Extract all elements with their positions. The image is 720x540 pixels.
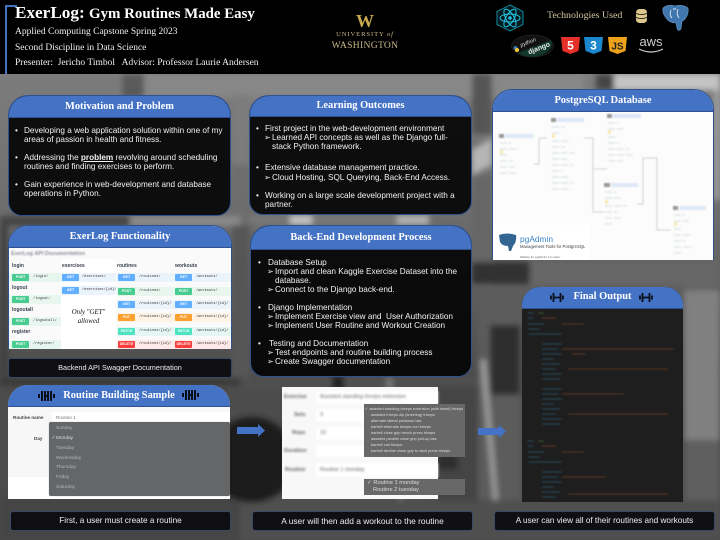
caption: view routines	[494, 511, 715, 531]
subtitle lines: Presenter: Jericho Timbol Advisor: Professor Laurie Andersen	[15, 58, 259, 68]
column: routines: PUT	[123, 315, 130, 319]
caption: create a routine: First, a user must create a routine	[59, 516, 182, 525]
icon: dumbbell left	[550, 293, 564, 302]
text block	[258, 258, 457, 366]
subtitle lines: Applied Computing Capstone Spring 2023	[15, 27, 178, 37]
column: login: /login/	[33, 275, 48, 279]
text block: Developing a web application solution within one of my	[24, 126, 222, 135]
day dropdown: Thursday	[56, 465, 76, 470]
icon: Python Django badge: python	[519, 37, 537, 49]
icon: dumbbell right	[639, 293, 653, 302]
column: routines: /routines/{id}/	[139, 302, 171, 306]
text block: ➢	[267, 285, 274, 294]
column: routines: /routines/{id}/	[139, 329, 171, 333]
logo: University of Washington: W	[356, 11, 374, 31]
blurred form: Routine 1 monday	[320, 467, 365, 473]
pgAdmin status: Waiting for pgAdmin 4 to start...	[520, 255, 562, 259]
day dropdown: Saturday	[56, 485, 75, 490]
text block: ➢	[267, 357, 274, 366]
heading: Routine Building Sample	[63, 390, 175, 401]
icon: JavaScript	[608, 37, 627, 54]
column: workouts: DELETE	[177, 342, 190, 346]
text block: Connect to the Django back-end.	[275, 285, 395, 294]
white lower area	[8, 477, 230, 499]
day dropdown	[49, 422, 230, 496]
exercise dropdown: barbell close grip bench press triceps	[371, 430, 435, 435]
text block: Database Setup	[268, 258, 327, 267]
text block: Learned API concepts as well as the Django full-	[272, 133, 448, 142]
day dropdown: ✓	[52, 436, 56, 441]
text block: ➢	[264, 133, 271, 142]
heading: PostgreSQL Database	[554, 95, 652, 106]
icon: CSS3: 3	[590, 38, 597, 52]
text block: •	[15, 126, 18, 135]
arrow: routine to workout	[237, 424, 265, 437]
column: routines	[117, 263, 175, 349]
blurred form: 10	[320, 430, 326, 436]
exercise dropdown: barbell alternate biceps curl biceps	[371, 424, 431, 429]
text block: Create Swagger documentation	[275, 357, 390, 366]
column: login: POST	[16, 297, 25, 301]
heading	[9, 96, 230, 118]
column: workouts: /workouts/{id}/	[196, 315, 228, 319]
heading: Learning Outcomes	[316, 100, 405, 111]
schema diagram	[498, 113, 706, 254]
column: login: /logout/	[33, 297, 50, 301]
swagger title: ExerLog API Documentation	[11, 251, 85, 257]
column: login: POST	[16, 275, 25, 279]
exercise dropdown: ✓ assisted standing triceps extension (with towel) triceps	[365, 406, 463, 411]
panel: ExerLog functionality	[8, 225, 232, 349]
subtitle lines	[15, 27, 259, 68]
heading	[9, 226, 231, 248]
text block: Gain experience in web-development and database	[24, 180, 211, 189]
form labels: Routine name	[13, 415, 43, 420]
icon: React	[496, 4, 524, 32]
text block: Implement User Routine and Workout Creation	[275, 321, 445, 330]
column: login	[9, 263, 61, 349]
arrow: workout to output	[478, 425, 506, 438]
exercise dropdown: assisted parallel close grip pull-up lats	[371, 436, 437, 441]
blurred JSON output	[526, 312, 674, 498]
annotation: only GET allowed	[72, 309, 106, 324]
text block: Extensive database management practice.	[265, 163, 420, 172]
text block: ➢	[267, 312, 274, 321]
text block: Working on a large scale development project with a	[265, 191, 455, 200]
exercise dropdown: alternate lateral pulldown lats	[371, 418, 421, 423]
icon: Python Django badge	[511, 34, 554, 58]
column: routines: /routines/{id}/	[139, 315, 171, 319]
blurred form: Routine	[285, 467, 305, 473]
heading: Final Output	[573, 291, 632, 302]
blurred form: Sets	[294, 412, 306, 418]
column: exercises: GET	[67, 275, 74, 279]
icon: Python Django badge: django	[527, 41, 551, 56]
heading	[250, 96, 471, 117]
column: routines: GET	[123, 275, 130, 279]
text block: •	[258, 339, 261, 348]
text block: routines and finding exercises to perform.	[24, 162, 174, 171]
text block: •	[258, 303, 261, 312]
icon: dumbbell left	[38, 391, 55, 401]
text block: Cloud Hosting, SQL Querying, Back-End Access.	[272, 173, 450, 182]
column: exercises: GET	[67, 288, 74, 292]
routine dropdown	[364, 479, 465, 495]
column: routines: routines	[117, 263, 137, 269]
annotation: only GET allowed: Only "GET"	[72, 309, 105, 316]
text block: ➢	[267, 267, 274, 276]
text block: ➢	[264, 173, 271, 182]
column: login: POST	[16, 319, 25, 323]
column: exercises: /exercises/{id}/	[82, 288, 117, 292]
column: routines: /routines/	[139, 289, 161, 293]
blurred form	[282, 390, 440, 478]
icon: database	[636, 9, 647, 23]
column: exercises	[61, 259, 116, 350]
column: login: register	[12, 329, 30, 335]
column: routines: PATCH	[121, 329, 132, 333]
icon: HTML5	[561, 37, 580, 54]
column: login: login	[12, 263, 24, 269]
text block: Import and clean Kaggle Exercise Dataset into the	[275, 267, 457, 276]
exercise dropdown: barbell decline close grip to skull press triceps	[371, 448, 450, 453]
icon: pgAdmin elephant	[499, 234, 516, 251]
exercise dropdown: assisted triceps dip (kneeling) triceps	[371, 412, 435, 417]
text block: Test endpoints and routine building process	[275, 348, 432, 357]
day dropdown: Sunday	[56, 426, 72, 431]
column: routines: POST	[122, 289, 131, 293]
day dropdown: Monday	[56, 436, 73, 441]
text block: •	[256, 124, 259, 133]
day label: Day	[34, 436, 42, 441]
panel: routine building sample	[8, 385, 230, 499]
heading: Back-End Development Process	[290, 232, 432, 243]
text block: ➢	[267, 321, 274, 330]
caption: view routines: A user can view all of their routines and workouts	[516, 516, 693, 525]
text block: ➢	[267, 348, 274, 357]
text block	[15, 126, 222, 198]
blurred form: Exercise	[284, 394, 307, 400]
technologies used label: Technologies Used	[547, 10, 622, 21]
logo: University of Washington: UNIVERSITY of	[336, 31, 394, 38]
text block: Django Implementation	[268, 303, 352, 312]
text block: database.	[275, 276, 311, 285]
text block: Testing and Documentation	[269, 339, 368, 348]
caption: create a routine	[10, 511, 231, 531]
day dropdown: Friday	[56, 475, 69, 480]
routine name input	[52, 412, 230, 424]
title: ExerLog: Gym Routines Made Easy	[15, 3, 255, 22]
icon: CSS3	[584, 37, 603, 54]
column: workouts: /workouts/{id}/	[196, 342, 228, 346]
exercise dropdown: barbell curl biceps	[371, 442, 402, 447]
blurred form: Duration	[284, 448, 307, 454]
text block: •	[15, 153, 18, 162]
column: routines: /routines/	[139, 275, 161, 279]
panel: learning outcomes	[249, 95, 472, 215]
column: login: logout	[12, 285, 27, 291]
heading	[493, 90, 713, 112]
header band	[0, 0, 720, 74]
caption: swagger documentation	[8, 358, 232, 378]
blurred form: 3	[320, 412, 323, 418]
blurred form: Assisted standing triceps extension	[320, 394, 406, 400]
routine dropdown: ✓ Routine 1 monday	[367, 480, 420, 486]
text block	[256, 124, 455, 209]
caption: add a workout	[252, 511, 473, 531]
text block: •	[256, 163, 259, 172]
routine name input: Routine 1	[56, 415, 76, 420]
panel: PostgreSQL database	[492, 89, 714, 260]
panel: add workout screenshot	[282, 387, 438, 499]
text block: stack Python framework.	[272, 142, 362, 151]
icon: dumbbell right	[182, 390, 199, 400]
day dropdown: Wednesday	[56, 456, 81, 461]
text block: partner.	[265, 200, 293, 209]
column: workouts: PATCH	[178, 329, 189, 333]
column: routines: DELETE	[120, 342, 133, 346]
column: exercises: /exercises/	[82, 275, 106, 279]
column: workouts: /workouts/{id}/	[196, 302, 228, 306]
heading	[522, 287, 683, 309]
text block: •	[256, 191, 259, 200]
column: workouts: GET	[180, 275, 187, 279]
icon: PostgreSQL elephant	[662, 5, 688, 31]
column: workouts: /workouts/	[196, 275, 218, 279]
column: workouts	[175, 263, 231, 349]
text block: Addressing the problem revolving around scheduling	[24, 153, 217, 162]
text block: •	[258, 258, 261, 267]
caption: swagger documentation: Backend API Swagger Documentation	[58, 363, 182, 372]
column: workouts: POST	[179, 289, 188, 293]
column: login: POST	[16, 342, 25, 346]
pgAdmin tagline: Management Tools for PostgreSQL	[520, 244, 585, 249]
header accent bracket	[5, 5, 17, 74]
text block: operations in Python.	[24, 189, 101, 198]
text block: Implement Exercise view and User Authorization	[275, 312, 453, 321]
annotation: only GET allowed: allowed	[78, 318, 99, 324]
text block: areas of passion in health and fitness.	[24, 135, 161, 144]
logo: University of Washington	[332, 11, 398, 51]
column: workouts: /workouts/{id}/	[196, 329, 228, 333]
panel: motivation and problem	[8, 95, 231, 216]
column: login: /logoutall/	[33, 319, 57, 323]
column: workouts: workouts	[175, 263, 197, 269]
icon: JavaScript: JS	[611, 42, 624, 52]
heading	[8, 385, 230, 407]
heading	[251, 226, 471, 250]
panel: back-end development process	[250, 225, 472, 377]
heading: Motivation and Problem	[65, 101, 174, 112]
column: login: logoutall	[12, 307, 33, 313]
pgAdmin splash	[493, 225, 589, 260]
caption: add a workout: A user will then add a workout to the routine	[281, 516, 444, 526]
pgAdmin wordmark: pgAdmin	[520, 234, 553, 244]
column: workouts: GET	[180, 302, 187, 306]
text block: •	[15, 180, 18, 189]
icon: HTML5: 5	[567, 38, 574, 52]
logo: University of Washington: WASHINGTON	[332, 40, 398, 51]
column: workouts: /workouts/	[196, 289, 218, 293]
blurred form: Reps	[292, 430, 305, 436]
heading: ExerLog Functionality	[70, 231, 170, 242]
column: login: /register/	[33, 342, 55, 346]
column: routines: GET	[123, 302, 130, 306]
text block: First project in the web-development environment	[265, 124, 444, 133]
subtitle lines: Second Discipline in Data Science	[15, 43, 146, 53]
day dropdown: Tuesday	[56, 446, 74, 451]
routine dropdown: Routine 2 tuesday	[373, 487, 419, 493]
panel: final output	[522, 287, 683, 502]
column: exercises: exercises	[62, 263, 85, 269]
exercise dropdown	[364, 404, 465, 457]
column: workouts: PUT	[180, 315, 187, 319]
column: routines: /routines/{id}/	[139, 342, 171, 346]
